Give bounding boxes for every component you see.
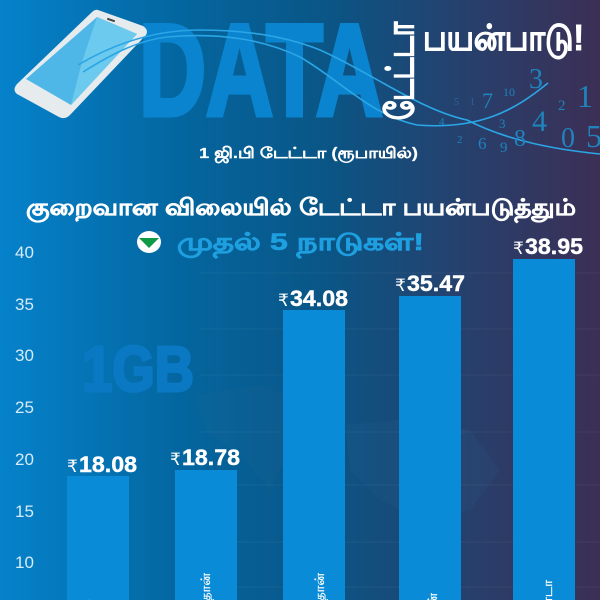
y axis labels: 25: [15, 398, 34, 417]
floating numbers decoration: 4: [439, 116, 445, 128]
y axis labels: 10: [15, 553, 34, 572]
floating numbers decoration: 5: [454, 97, 459, 108]
background world map watermark: [195, 385, 500, 520]
floating numbers decoration: 1: [470, 97, 475, 108]
icon: smartphone: [14, 10, 147, 118]
bar: Kazakhstan: ₹: [278, 291, 289, 310]
1GB watermark: 1GB: [82, 333, 194, 405]
data signal curves: [78, 30, 600, 154]
bar: Ukraine: 35.47: [407, 271, 465, 296]
bar: Kazakhstan: 34.08: [290, 286, 348, 311]
bar: Rwanda: [513, 234, 583, 600]
headline line two: முதல் 5 நாடுகள்!: [177, 229, 424, 259]
bar: Kyrgyzstan: ₹: [170, 450, 181, 469]
icon: down arrow badge: [137, 231, 161, 253]
y axis labels: 30: [15, 346, 34, 365]
y axis labels: 35: [15, 295, 34, 314]
headline line one: குறைவான விலையில் டேட்டா பயன்படுத்தும்: [26, 194, 576, 223]
DATA watermark heading: DATA: [139, 0, 383, 143]
bar chart: [15, 234, 583, 600]
y axis labels: 15: [15, 502, 34, 521]
floating numbers decoration: 7: [482, 88, 493, 113]
floating numbers decoration: 3: [499, 116, 506, 131]
Tamil heading: usage: பயன்பாடு!: [423, 17, 584, 59]
y axis labels: [15, 243, 34, 572]
bar: Ukraine: ₹: [395, 276, 406, 295]
bar: India: ₹: [67, 457, 78, 476]
floating numbers decoration: 9: [500, 140, 508, 156]
bar: Ukraine: [395, 271, 465, 600]
bar: Kyrgyzstan: 18.78: [182, 445, 240, 470]
floating numbers decoration: 1: [577, 78, 593, 114]
floating numbers decoration: 10: [503, 85, 515, 99]
bar: Rwanda: 38.95: [525, 234, 583, 259]
floating numbers decoration: [439, 64, 600, 156]
y axis labels: 40: [15, 243, 34, 262]
bar: India: [67, 452, 137, 600]
floating numbers decoration: 6: [478, 134, 486, 153]
bar: Kyrgyzstan: [170, 445, 240, 600]
floating numbers decoration: 8: [514, 126, 526, 152]
floating numbers decoration: 0: [561, 123, 575, 154]
floating numbers decoration: 2: [457, 134, 462, 146]
bar: India: 18.08: [79, 452, 137, 477]
y axis labels: 20: [15, 450, 34, 469]
floating numbers decoration: 2: [558, 98, 566, 114]
background grid lines: [200, 273, 600, 587]
floating numbers decoration: 3: [529, 64, 543, 95]
bar: Rwanda: ₹: [513, 239, 524, 258]
floating numbers decoration: 4: [532, 105, 547, 138]
subtitle: 1 GB data in rupees: 1 ஜி.பி டேட்டா (ரூபாயில்): [199, 145, 418, 163]
bar: Kazakhstan: [278, 286, 348, 600]
